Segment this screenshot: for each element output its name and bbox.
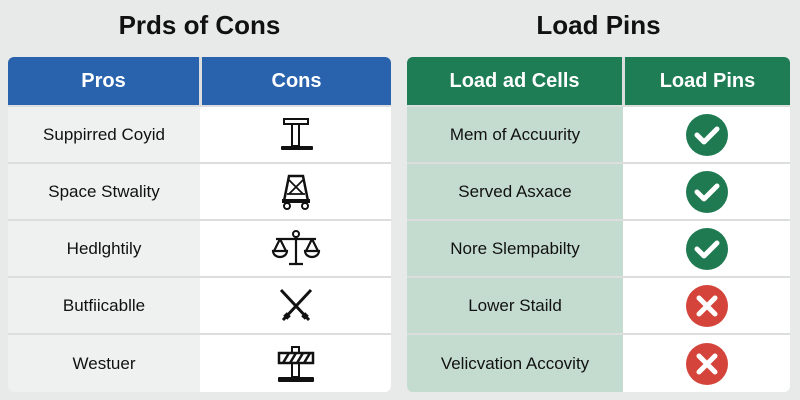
header: Cons [202, 57, 391, 105]
header: Load ad Cells: Load ad Cells [449, 70, 580, 92]
panel: load pins table [407, 57, 790, 392]
header: Pros: Pros [81, 70, 126, 92]
row 2 [8, 164, 391, 219]
row 5 [8, 335, 391, 392]
row 5: Westuer [72, 354, 136, 372]
row 3: Nore Slempabilty [450, 238, 580, 258]
row 3 [8, 221, 391, 276]
row 1 [8, 107, 391, 162]
title: left: Prds of Cons [119, 10, 280, 40]
row 5 [407, 335, 790, 392]
row 2: Served Asxace [458, 182, 572, 200]
row 2: Space Stwality [48, 182, 160, 200]
row 1: Suppirred Coyid [43, 124, 165, 144]
row 4: Lower Staild [468, 296, 562, 314]
row 4: Butfiicablle [63, 296, 145, 314]
row 4 [407, 278, 790, 333]
row 1: Mem of Accuurity [450, 124, 580, 144]
panel: pros/cons table [8, 57, 391, 392]
title: right: Load Pins [536, 10, 661, 40]
row 3: Hedlghtily [67, 238, 141, 258]
header: Load ad Cells [407, 57, 622, 105]
row 4 [8, 278, 391, 333]
row 3 [407, 221, 790, 276]
header: Load Pins [625, 57, 790, 105]
header: Cons: Cons [272, 70, 322, 92]
row 1 [407, 107, 790, 162]
header: Pros [8, 57, 199, 105]
row 5: Velicvation Accovity [441, 354, 589, 372]
row 2 [407, 164, 790, 219]
header: Load Pins: Load Pins [660, 70, 755, 92]
